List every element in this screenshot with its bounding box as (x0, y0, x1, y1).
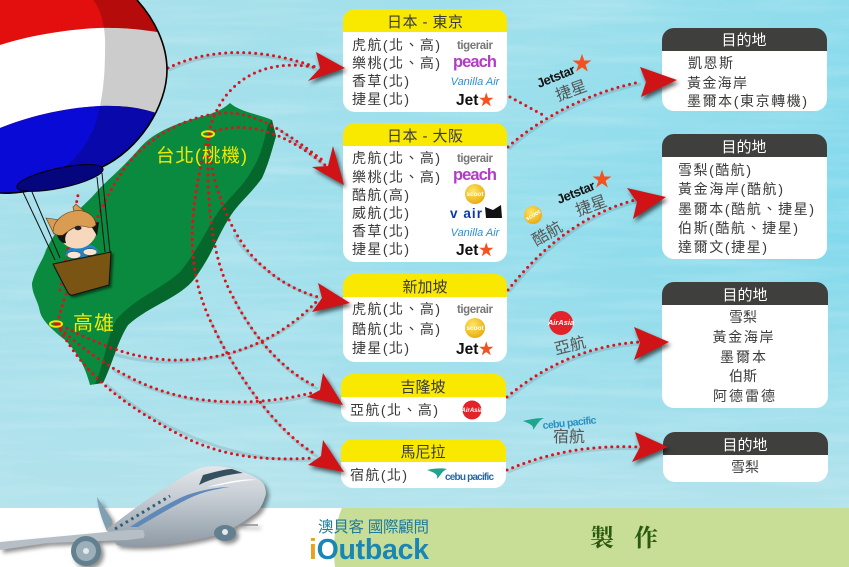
heading: 目的地 (722, 287, 768, 304)
label: Scoot: 酷航 (529, 218, 566, 250)
airline logos (451, 40, 501, 109)
destination list: 雪梨 (729, 309, 757, 325)
destination list (678, 162, 814, 255)
heading: 吉隆坡 (400, 379, 446, 396)
destination list: 達爾文(捷星) (678, 239, 767, 255)
flights list (352, 37, 440, 107)
heading: 新加坡 (402, 279, 448, 296)
destination list: 凱恩斯 (688, 55, 733, 71)
route: Kaohsiung to Singapore (56, 300, 318, 360)
balloon ropes (22, 173, 110, 260)
cabin windows (115, 496, 170, 529)
route lines to destinations (507, 82, 641, 472)
windshield (199, 469, 243, 485)
route: Kuala Lumpur to Australia (507, 342, 640, 397)
city label: Taipei: 台北(桃機) (156, 145, 247, 166)
airline logos: v air (450, 206, 483, 221)
route: Taipei to Osaka (209, 127, 325, 165)
engine (71, 536, 101, 566)
label: AirAsia: AirAsia (547, 318, 574, 327)
logo: AirAsia (460, 400, 483, 420)
label: Scoot (524, 206, 566, 250)
hat (53, 211, 96, 235)
panel: destinations 2 (662, 134, 827, 259)
flights list: 虎航(北、高) (352, 150, 440, 166)
route: Kaohsiung to Manila (58, 325, 315, 459)
footer band (0, 508, 849, 567)
flights list: 樂桃(北、高) (352, 55, 440, 71)
logo: Cebu Pacific: cebu pacific (445, 472, 494, 483)
hot air balloon (0, 0, 170, 295)
destination list: 墨爾本(酷航、捷星) (678, 201, 814, 217)
label: Jetstar to Japan (535, 53, 592, 105)
destination list: 黃金海岸 (687, 75, 747, 91)
fuselage (107, 466, 266, 546)
heading: 目的地 (721, 139, 767, 156)
flights list: 香草(北) (352, 73, 409, 89)
destination list: 黃金海岸 (712, 329, 774, 345)
airline logos: Jet★ (456, 341, 494, 358)
destination list: 墨爾本(東京轉機) (687, 93, 807, 109)
label: Cebu Pacific (523, 414, 597, 446)
city marker: Taipei (202, 131, 214, 137)
airline logos: Jet★ (456, 92, 494, 109)
route: Kaohsiung to Osaka (58, 113, 325, 323)
arrow: to Manila (308, 440, 344, 472)
basket (53, 252, 111, 295)
city marker: Kaohsiung (50, 321, 62, 327)
destination list: 阿德雷德 (713, 388, 775, 404)
map of Taiwan (32, 103, 276, 385)
flight row: 宿航(北) (350, 467, 407, 483)
route: Taipei to Tokyo (209, 65, 318, 133)
panel: destinations 1 (662, 28, 827, 111)
destination list: 伯斯 (729, 368, 757, 384)
airline logos: scoot (466, 325, 484, 332)
flights list: 香草(北) (352, 223, 409, 239)
route lines from Taipei and Kaohsiung (56, 53, 326, 460)
panel: Singapore flights (343, 274, 507, 362)
arrow: to Cairns region (640, 67, 677, 97)
route: Kaohsiung to Tokyo (60, 53, 318, 290)
paws (67, 251, 81, 259)
cat character (46, 204, 99, 259)
airline logos: peach (453, 166, 497, 184)
logo: iOutback (309, 518, 429, 566)
destination list: 雪梨(酷航) (678, 162, 751, 178)
face (60, 226, 97, 248)
label: AirAsia (547, 311, 588, 359)
destination list: 墨爾本 (720, 349, 766, 365)
route: Manila to Australia (507, 447, 640, 470)
arrow: to Sydney region (627, 188, 666, 219)
ears (46, 204, 85, 234)
panel: destinations 3 (662, 282, 828, 408)
route: Taipei to Singapore (209, 133, 318, 297)
label: Jetstar to Australia: 捷星 (573, 192, 609, 220)
airline logos: Jet★ (456, 242, 494, 259)
destination list (687, 55, 807, 109)
hair (56, 222, 99, 243)
flights list (352, 301, 440, 356)
airline logos (456, 304, 494, 358)
route: Taipei to Manila (192, 133, 317, 455)
panel: Manila flights (341, 439, 506, 488)
arrow: to Kuala Lumpur (307, 373, 343, 405)
label: Jetstar to Australia (555, 169, 612, 220)
heading: 馬尼拉 (400, 444, 446, 461)
flights list: 威航(北) (352, 205, 409, 221)
route: Taipei to Kuala Lumpur (208, 133, 317, 387)
flights list: 虎航(北、高) (352, 37, 440, 53)
label: Scoot: scoot (525, 209, 542, 222)
heading: 日本 - 東京 (387, 14, 463, 31)
destination list (712, 309, 775, 404)
destination list: 伯斯(酷航、捷星) (678, 220, 798, 236)
label: Jetstar to Japan: Jetstar (535, 62, 577, 91)
label: Jetstar to Japan: ★ (572, 53, 592, 75)
heading: 目的地 (722, 437, 768, 454)
airline logos: tigerair (457, 40, 494, 52)
flights list: 捷星(北) (352, 340, 409, 356)
white highlight (207, 479, 257, 487)
airline logos: Vanilla Air (451, 76, 501, 88)
airline logos: Vanilla Air (451, 227, 501, 239)
flights list (352, 150, 440, 257)
arrow: to Sydney via Cebu (632, 432, 668, 462)
body (65, 244, 99, 258)
route: Tokyo to Jetstar line (510, 97, 543, 115)
credit: produced by: 製 作 (590, 525, 658, 552)
airline logos: tigerair (457, 153, 494, 165)
flights list: 虎航(北、高) (352, 301, 440, 317)
nose (74, 226, 82, 230)
label: Jetstar to Australia: Jetstar (555, 178, 597, 207)
flights list: 樂桃(北、高) (352, 169, 440, 185)
flight row: 亞航(北、高) (350, 402, 438, 418)
wordmark: iOutback (309, 534, 429, 566)
logo: Cebu Pacific (427, 468, 494, 483)
blue stripe (130, 487, 230, 527)
arrow: to Singapore (312, 283, 350, 312)
company name: 澳貝客 國際顧問 (318, 518, 429, 536)
balloon mouth (15, 159, 105, 197)
panel: destinations 4 (663, 432, 828, 482)
balloon envelope (0, 0, 170, 200)
heading: 目的地 (721, 32, 767, 49)
destination list: 雪梨 (731, 459, 759, 475)
panel: Kuala Lumpur flights (341, 374, 506, 422)
airline logos: scoot (466, 191, 484, 198)
label: Jetstar to Japan: 捷星 (553, 77, 589, 105)
airplane (0, 466, 266, 566)
flights list: 酷航(高) (352, 187, 409, 203)
wing (0, 530, 144, 550)
tail fin (97, 497, 112, 531)
arrow: to Tokyo (308, 52, 345, 81)
airline logos (450, 153, 502, 259)
city label: Kaohsiung: 高雄 (73, 312, 114, 335)
flights list: 捷星(北) (352, 241, 409, 257)
label: Cebu Pacific: 宿航 (553, 428, 585, 446)
route: Kaohsiung to Kuala Lumpur (56, 325, 315, 402)
landing gear strut (240, 524, 258, 526)
label: Jetstar to Australia: ★ (592, 169, 612, 191)
airline logos: tigerair (457, 304, 494, 316)
panel: Tokyo flights (343, 9, 507, 112)
destination list: 黃金海岸(酷航) (678, 181, 783, 197)
panel: Osaka flights (343, 123, 507, 262)
arrow: to Australia via AirAsia (634, 327, 669, 360)
route: Osaka to Australia (508, 82, 640, 147)
flights list: 酷航(北、高) (352, 321, 440, 337)
airline logos: peach (453, 53, 497, 71)
flights list: 捷星(北) (352, 91, 409, 107)
logo: AirAsia: AirAsia (460, 408, 483, 414)
route: Singapore to Australia (508, 200, 635, 290)
rear wheel (214, 525, 236, 541)
label: AirAsia: 亞航 (553, 333, 588, 359)
arrow: to Osaka (312, 146, 344, 185)
label: Cebu Pacific: cebu pacific (542, 414, 597, 432)
heading: 日本 - 大阪 (387, 128, 463, 145)
